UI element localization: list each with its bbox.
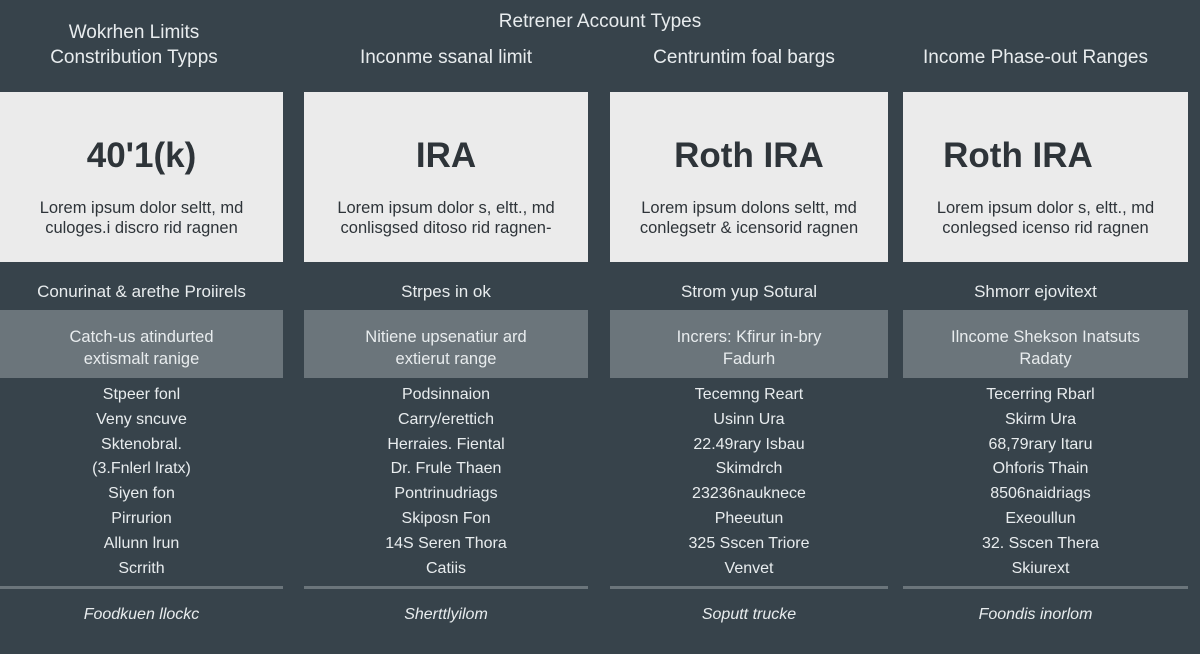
card [304, 92, 588, 262]
grey band: Fadurh [723, 350, 775, 368]
card: 40'1(k) [87, 136, 196, 175]
list: Podsinnaion [402, 386, 490, 403]
list: 325 Sscen Triore [689, 535, 809, 552]
footer: Foodkuen llockc [84, 606, 199, 623]
title: Retrener Account Types [499, 11, 701, 32]
grey band: extismalt ranige [84, 350, 199, 368]
panel: Roth IRA 2 [903, 47, 1188, 623]
footer: Sherttlyilom [404, 606, 488, 623]
card [903, 92, 1188, 262]
footer: Soputt trucke [702, 606, 796, 623]
card: Lorem ipsum dolor s, eltt., md [937, 199, 1154, 217]
list: Skimdrch [716, 460, 782, 477]
list: 32. Sscen Thera [982, 535, 1099, 552]
list: Pirrurion [111, 510, 172, 527]
list: Tecemng Reart [695, 386, 803, 403]
card: IRA [416, 136, 476, 175]
card: conlisgsed ditoso rid ragnen- [341, 218, 551, 236]
subheading: Shmorr ejovitext [974, 282, 1097, 301]
grey band: Nitiene upsenatiur ard [365, 328, 527, 346]
list: 23236nauknece [692, 485, 806, 502]
list: (3.Fnlerl lratx) [92, 460, 191, 477]
grey band: Radaty [1019, 350, 1072, 368]
list: Venvet [725, 560, 773, 577]
card: Lorem ipsum dolor seltt, md [40, 199, 243, 217]
list: Carry/erettich [398, 411, 494, 428]
list: Skirm Ura [1005, 411, 1076, 428]
panel: 401k [0, 22, 283, 623]
list: Skiposn Fon [402, 510, 490, 527]
list: Dr. Frule Thaen [391, 460, 501, 477]
grey band [304, 310, 588, 378]
heading [50, 22, 218, 68]
list [385, 386, 507, 577]
heading: Inconme ssanal limit [360, 47, 532, 68]
card [610, 92, 888, 262]
list: Skiurext [1012, 560, 1069, 577]
list: Tecerring Rbarl [986, 386, 1095, 403]
list: Allunn lrun [104, 535, 179, 552]
card: Roth IRA [943, 136, 1093, 175]
card [0, 92, 283, 262]
list: Sktenobral. [101, 436, 182, 453]
list: Herraies. Fiental [387, 436, 505, 453]
panel: Roth IRA 1 [610, 47, 888, 623]
grey band [0, 310, 283, 378]
list: Pontrinudriags [394, 485, 498, 502]
card: Lorem ipsum dolor s, eltt., md [337, 199, 555, 217]
list: Catiis [426, 560, 466, 577]
grey band: Ilncome Shekson Inatsuts [951, 328, 1140, 346]
grey band [610, 310, 888, 378]
grey band: extierut range [396, 350, 496, 368]
panel: IRA [304, 47, 588, 623]
list: Usinn Ura [713, 411, 785, 428]
footer: Foondis inorlom [979, 606, 1092, 623]
card: Roth IRA [674, 136, 824, 175]
list [982, 386, 1100, 577]
grey band: Incrers: Kfirur in-bry [677, 328, 821, 346]
list: Stpeer fonl [103, 386, 180, 403]
subheading: Conurinat & arethe Proiirels [37, 282, 246, 301]
grey band [903, 310, 1188, 378]
heading: Income Phase-out Ranges [923, 47, 1148, 68]
list: 8506naidriags [990, 485, 1091, 502]
list: 22.49rary Isbau [693, 436, 805, 453]
subheading: Strpes in ok [401, 282, 491, 301]
list: Pheeutun [715, 510, 783, 527]
card: conlegsed icenso rid ragnen [942, 218, 1149, 236]
heading: Centruntim foal bargs [653, 47, 835, 68]
list: Ohforis Thain [993, 460, 1088, 477]
list [92, 386, 191, 577]
card: conlegsetr & icensorid ragnen [640, 218, 858, 236]
list: 14S Seren Thora [385, 535, 507, 552]
subheading: Strom yup Sotural [681, 282, 817, 301]
card: culoges.i discro rid ragnen [45, 218, 238, 236]
list: Scrrith [118, 560, 165, 577]
grey band: Catch-us atindurted [70, 328, 214, 346]
list [689, 386, 809, 577]
list: Exeoullun [1005, 510, 1076, 527]
heading: Wokrhen Limits [69, 22, 199, 43]
list: Veny sncuve [96, 411, 187, 428]
heading: Constribution Typps [50, 47, 218, 68]
list: Siyen fon [108, 485, 175, 502]
card: Lorem ipsum dolons seltt, md [641, 199, 857, 217]
list: 68,79rary Itaru [988, 436, 1093, 453]
